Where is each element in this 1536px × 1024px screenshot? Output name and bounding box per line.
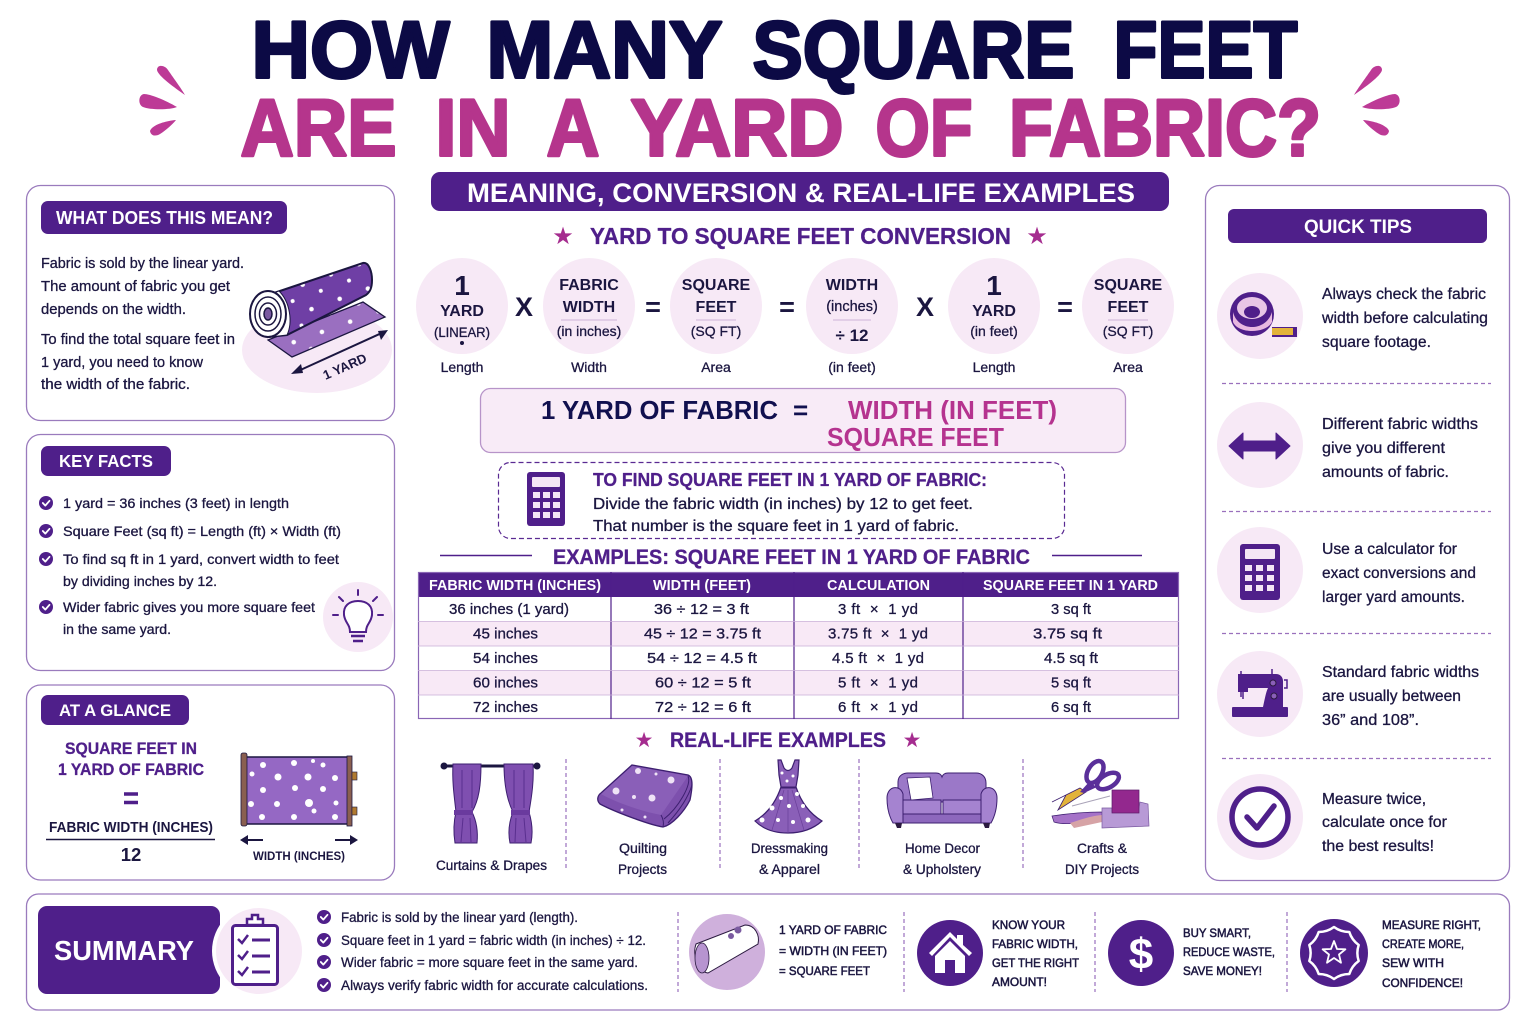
step: square feet: (SQ FT) [691, 323, 741, 339]
operator: equals: = [645, 292, 661, 322]
text block: explanation [41, 256, 244, 393]
decorative sparks right [1354, 66, 1400, 136]
list: summary points: Always verify fabric width for accurate calculations. [341, 978, 648, 993]
heading: real-life examples: ★ [635, 729, 653, 752]
example: crafts and diy projects [1052, 758, 1149, 877]
heading: what does this mean: WHAT DOES THIS MEAN? [56, 208, 273, 228]
list: key facts [39, 495, 341, 637]
text block: explanation: To find the total square feet in [41, 332, 235, 348]
table rows: 36 inches (1 yard) [449, 601, 569, 618]
table rows: 3 ft × 1 yd [838, 601, 918, 618]
summary item: house: KNOW YOUR [992, 918, 1065, 932]
list: key facts: by dividing inches by 12. [63, 573, 217, 589]
tip: check width: width before calculating [1321, 310, 1488, 327]
summary item: house: AMOUNT! [992, 975, 1047, 989]
table header: FABRIC WIDTH (INCHES) [429, 578, 601, 594]
step: fabric width: (in inches) [557, 323, 621, 339]
heading: yard to square feet conversion: ★ [552, 223, 574, 250]
text block: explanation: depends on the width. [41, 302, 186, 318]
summary item: badge: MEASURE RIGHT, [1382, 918, 1481, 932]
text block: explanation: Fabric is sold by the linear yard. [41, 256, 244, 272]
heading: key facts [41, 446, 171, 476]
table header: CALCULATION [827, 578, 930, 594]
summary item: dollar: SAVE MONEY! [1183, 964, 1262, 978]
table rows: 45 inches [473, 626, 538, 642]
example: home decor and upholstery: & Upholstery [903, 862, 981, 877]
panel: quick tips [1206, 186, 1510, 880]
example: home decor and upholstery [887, 773, 997, 877]
list: key facts: 1 yard = 36 inches (3 feet) in length [63, 495, 289, 511]
step: fabric width: WIDTH [563, 299, 615, 316]
summary item: dollar: BUY SMART, [1183, 926, 1251, 940]
step: square feet result: FEET [1108, 299, 1149, 316]
chart: conversion equation [416, 258, 1174, 375]
panel: at a glance [26, 685, 394, 880]
step: square feet result [1082, 258, 1174, 375]
tip: different widths [1217, 402, 1478, 488]
formula: at a glance: 1 YARD OF FABRIC [58, 760, 204, 779]
step: 1 yard linear: (LINEAR) [434, 324, 490, 340]
tip: measure twice: Measure twice, [1322, 791, 1426, 808]
list: summary points: Wider fabric = more square feet in the same yard. [341, 955, 638, 970]
tip: use a calculator: larger yard amounts. [1322, 589, 1465, 606]
formula: at a glance: FABRIC WIDTH (INCHES) [49, 819, 213, 836]
step: 1 yard in feet: 1 [986, 270, 1002, 301]
step: 1 yard linear: Length [441, 359, 483, 375]
table: examples [418, 572, 1179, 719]
list: summary points: Fabric is sold by the linear yard (length). [341, 910, 578, 925]
callout: formula: = [793, 395, 808, 425]
summary item: badge [1300, 918, 1481, 990]
icon: light bulb [323, 582, 393, 652]
table rows: 3 sq ft [1051, 601, 1092, 618]
heading: real-life examples: ★ [903, 729, 921, 752]
banner: subtitle [431, 172, 1169, 211]
icon: calculator [527, 472, 565, 526]
table rows [449, 601, 1103, 716]
heading: quick tips [1228, 209, 1487, 243]
table header [429, 578, 1158, 594]
example: crafts and diy projects: DIY Projects [1065, 862, 1139, 877]
step: square feet result: SQUARE [1094, 277, 1163, 294]
table rows: 6 ft × 1 yd [838, 699, 918, 716]
tip: different widths: Different fabric widths [1322, 416, 1478, 433]
tip: standard widths: are usually between [1322, 688, 1461, 705]
step: 1 yard linear [416, 258, 508, 375]
step: 1 yard linear: YARD [440, 303, 484, 320]
tip: measure twice: calculate once for [1322, 814, 1447, 831]
heading: quick tips: QUICK TIPS [1304, 217, 1412, 238]
step: width in feet: (in feet) [828, 359, 876, 375]
text block: how to find [593, 470, 987, 535]
table rows: 54 inches [473, 650, 538, 667]
step: square feet result: (SQ FT) [1103, 323, 1153, 339]
text block: explanation: 1 yard, you need to know [41, 355, 204, 371]
table rows: 6 sq ft [1051, 699, 1092, 716]
text block: explanation: The amount of fabric you get [41, 279, 230, 295]
callout: how to find [498, 462, 1064, 538]
title: ARE [240, 84, 396, 174]
title: YARD [630, 84, 844, 174]
operator: equals: = [1057, 292, 1073, 322]
summary item: badge: CONFIDENCE! [1382, 976, 1463, 990]
table rows: 4.5 ft × 1 yd [832, 650, 924, 667]
step: width in feet: WIDTH [826, 277, 878, 294]
list: summary points: Square feet in 1 yard = fabric width (in inches) ÷ 12. [341, 933, 646, 948]
example: quilting projects: Projects [618, 862, 667, 877]
panel: summary [26, 894, 1510, 1010]
example: dressmaking and apparel: & Apparel [759, 862, 820, 877]
example: dressmaking and apparel [751, 760, 828, 877]
table rows: 36 ÷ 12 = 3 ft [654, 601, 750, 618]
banner: subtitle: MEANING, CONVERSION & REAL-LIFE EXAMPLES [467, 178, 1135, 208]
example: curtains and drapes: Curtains & Drapes [436, 858, 547, 873]
title: MANY [486, 6, 722, 96]
step: 1 yard in feet: YARD [972, 303, 1016, 320]
icon: fabric width: WIDTH (INCHES) [253, 849, 345, 863]
tip: check width [1217, 273, 1488, 359]
table rows: 72 ÷ 12 = 6 ft [655, 699, 752, 716]
tip: standard widths [1217, 651, 1479, 737]
summary item: badge: CREATE MORE, [1382, 937, 1464, 951]
panel: what does this mean [26, 186, 394, 420]
text block: explanation: the width of the fabric. [41, 377, 190, 393]
summary item: dollar [1108, 920, 1275, 986]
list: key facts: Square Feet (sq ft) = Length (ft) × Width (ft) [63, 523, 341, 539]
decorative sparks left [139, 66, 185, 136]
callout: formula: 1 YARD OF FABRIC [541, 395, 778, 425]
tip: use a calculator [1217, 527, 1476, 613]
step: fabric width [543, 258, 635, 375]
heading: at a glance: AT A GLANCE [59, 701, 171, 720]
callout: formula [480, 388, 1126, 452]
step: square feet: Area [701, 359, 731, 375]
table rows: 3.75 ft × 1 yd [828, 626, 928, 642]
step: square feet result: Area [1113, 359, 1143, 375]
list: key facts: To find sq ft in 1 yard, convert width to feet [63, 551, 339, 567]
text block: how to find: That number is the square feet in 1 yard of fabric. [593, 518, 959, 535]
title: FABRIC? [1009, 84, 1321, 174]
operator: equals: = [779, 292, 795, 322]
heading: key facts: KEY FACTS [59, 451, 153, 471]
table rows: 54 ÷ 12 = 4.5 ft [647, 650, 758, 667]
table header: SQUARE FEET IN 1 YARD [983, 578, 1158, 594]
table rows: 60 ÷ 12 = 5 ft [655, 674, 752, 692]
step: 1 yard linear: 1 [454, 270, 470, 301]
table rows: 5 ft × 1 yd [838, 674, 918, 692]
step: width in feet: ÷ 12 [836, 326, 868, 345]
step: fabric width: FABRIC [559, 277, 619, 294]
example: dressmaking and apparel: Dressmaking [751, 841, 828, 856]
title [240, 6, 1321, 174]
heading: yard to square feet conversion: YARD TO SQUARE FEET CONVERSION [590, 223, 1011, 249]
tip: different widths: give you different [1322, 440, 1446, 457]
summary item: dollar: REDUCE WASTE, [1183, 945, 1275, 959]
table rows: 3.75 sq ft [1033, 626, 1103, 642]
operator: times: X [515, 292, 533, 322]
list: key facts: in the same yard. [63, 621, 171, 637]
operator: times: X [916, 292, 934, 322]
heading: summary [38, 904, 306, 998]
panel: key facts [26, 434, 394, 670]
callout: formula: SQUARE FEET [827, 422, 1004, 452]
title: HOW [252, 6, 450, 96]
title: FEET [1114, 6, 1298, 96]
icon: fabric roll: 1 YARD [321, 350, 369, 383]
text block: how to find: TO FIND SQUARE FEET IN 1 YARD OF FABRIC: [593, 470, 987, 490]
heading: summary: SUMMARY [54, 935, 194, 966]
table rows: 60 inches [473, 674, 538, 692]
formula: at a glance: 12 [121, 844, 141, 865]
step: square feet: SQUARE [682, 277, 751, 294]
tip: measure twice [1217, 774, 1447, 860]
list: key facts: Wider fabric gives you more square feet [63, 599, 315, 615]
tip: measure twice: the best results! [1322, 838, 1434, 855]
example: home decor and upholstery: Home Decor [905, 841, 980, 856]
heading: examples: EXAMPLES: SQUARE FEET IN 1 YARD OF FABRIC [553, 546, 1030, 569]
summary item: house: FABRIC WIDTH, [992, 937, 1078, 951]
text block: how to find: Divide the fabric width (in inches) by 12 to get feet. [593, 496, 973, 513]
example: crafts and diy projects: Crafts & [1077, 841, 1127, 856]
step: 1 yard in feet: (in feet) [970, 323, 1018, 339]
icon: clipboard [232, 915, 278, 984]
tip: check width: Always check the fabric [1322, 286, 1486, 303]
list: summary points [317, 910, 648, 993]
title: IN [436, 84, 510, 174]
title: A [546, 84, 600, 174]
formula: at a glance: SQUARE FEET IN [65, 739, 197, 758]
table rows: 72 inches [473, 699, 538, 716]
example: quilting projects [598, 765, 692, 877]
step: square feet: FEET [696, 299, 737, 316]
heading: real-life examples: REAL-LIFE EXAMPLES [670, 729, 886, 752]
step: 1 yard in feet: Length [973, 359, 1015, 375]
summary item: fabric roll: 1 YARD OF FABRIC [779, 923, 887, 937]
callout: formula: WIDTH (IN FEET) [848, 395, 1057, 425]
tip: use a calculator: exact conversions and [1322, 565, 1476, 582]
summary item: badge: SEW WITH [1382, 956, 1444, 970]
table rows: 45 ÷ 12 = 3.75 ft [644, 626, 762, 642]
summary item: dollar: $ [1129, 930, 1153, 979]
step: 1 yard in feet [948, 258, 1040, 375]
summary item: fabric roll: = WIDTH (IN FEET) [779, 944, 887, 958]
step: width in feet: (inches) [826, 299, 878, 315]
tip: standard widths: Standard fabric widths [1322, 664, 1479, 681]
summary item: fabric roll [689, 914, 887, 990]
step: fabric width: Width [571, 359, 607, 375]
summary item: fabric roll: = SQUARE FEET [779, 964, 871, 978]
table rows: 5 sq ft [1051, 674, 1092, 692]
summary item: house [917, 918, 1080, 989]
example: curtains and drapes [436, 762, 547, 873]
table header: WIDTH (FEET) [653, 578, 751, 594]
heading: at a glance [41, 695, 189, 725]
example: quilting projects: Quilting [619, 841, 667, 856]
title: SQUARE [752, 6, 1074, 96]
tip: different widths: amounts of fabric. [1322, 464, 1449, 481]
title: OF [876, 84, 972, 174]
tip: standard widths: 36” and 108”. [1322, 712, 1419, 729]
step: square feet [670, 258, 762, 375]
tip: use a calculator: Use a calculator for [1322, 541, 1457, 558]
step: width in feet [806, 258, 898, 375]
formula: at a glance [46, 739, 215, 865]
icon: fabric roll [242, 263, 392, 393]
summary item: house: GET THE RIGHT [992, 956, 1080, 970]
heading: yard to square feet conversion: ★ [1026, 223, 1048, 250]
icon: fabric width [240, 753, 358, 863]
tip: check width: square footage. [1322, 334, 1431, 351]
heading: what does this mean [41, 201, 287, 234]
table rows: 4.5 sq ft [1044, 650, 1099, 667]
